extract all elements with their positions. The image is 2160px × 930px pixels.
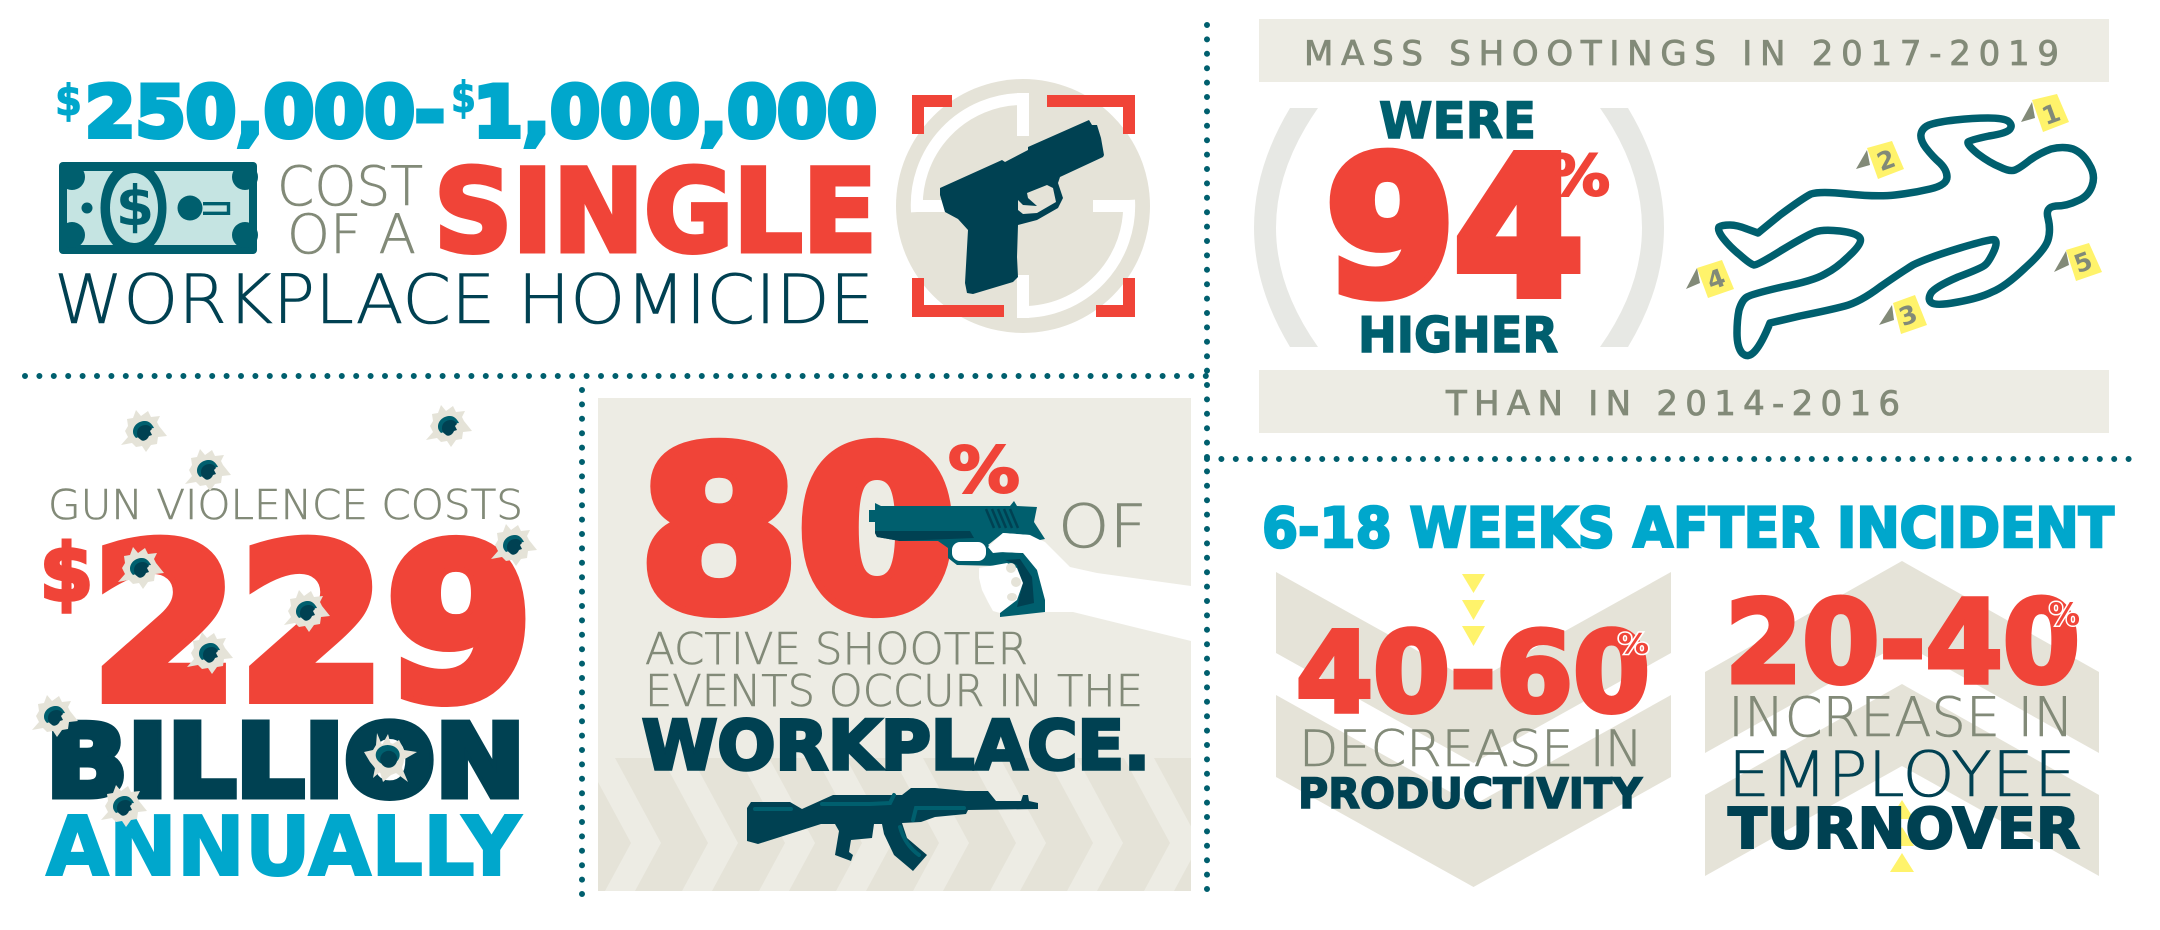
heading: 6-18 WEEKS AFTER INCIDENT — [1262, 496, 2114, 560]
text: billion: BILLION — [46, 703, 525, 820]
evidence marker 2: 2 — [1873, 144, 1899, 177]
stat: 80 percent: 80 — [640, 404, 956, 660]
evidence marker 1: 1 — [2038, 98, 2064, 131]
right parenthesis — [1600, 108, 1664, 347]
panel: 6-18 weeks after incident — [1262, 496, 2114, 887]
stat: 80 percent: % — [948, 434, 1020, 507]
banner: than in 2014-2016 — [1259, 370, 2109, 433]
chalk body outline — [1718, 118, 2093, 356]
text: single: SINGLE — [434, 145, 877, 278]
panel: gun violence costs — [32, 405, 537, 895]
stat: 229 dollars: $ — [40, 529, 93, 619]
stat: 94 percent: % — [1548, 144, 1610, 209]
stat: 20-40 percent: 20-40 — [1725, 576, 2080, 709]
icon: pistol in crosshair — [896, 79, 1150, 333]
text: active shooter events occur in the: ACTIVE SHOOTER — [645, 624, 1028, 675]
evidence marker 5 — [2054, 243, 2102, 281]
banner: mass shootings in 2017-2019: MASS SHOOTINGS IN 2017-2019 — [1304, 34, 2059, 74]
up chevrons — [1705, 561, 2099, 876]
text: employee: EMPLOYEE — [1728, 738, 2076, 811]
text: of: OF — [1058, 492, 1147, 562]
yellow down arrows — [1462, 574, 1485, 646]
stat: 40-60 percent: % — [1618, 627, 1649, 660]
text: workplace homicide: WORKPLACE HOMICIDE — [54, 261, 874, 340]
cost range heading: $ — [55, 76, 82, 126]
banner: mass shootings in 2017-2019 — [1259, 19, 2109, 82]
stat: 229 dollars: 229 — [91, 501, 533, 748]
panel: active shooter — [585, 398, 1200, 891]
evidence marker 4: 4 — [1703, 263, 1729, 296]
text: cost of a: OF A — [287, 203, 416, 266]
text: workplace: WORKPLACE. — [642, 707, 1150, 786]
down chevrons — [1276, 572, 1671, 887]
icon: dollar bill — [59, 161, 258, 255]
cost range heading: 1,000,000 — [473, 72, 877, 154]
panel background — [598, 398, 1191, 891]
text: decrease in: DECREASE IN — [1299, 720, 1643, 778]
stat: 40-60 percent: 40-60 — [1296, 609, 1650, 738]
text: active shooter events occur in the: EVENTS OCCUR IN THE — [645, 666, 1143, 717]
evidence marker 5: 5 — [2070, 246, 2096, 279]
text: higher: HIGHER — [1358, 307, 1558, 364]
cost range heading — [55, 72, 877, 154]
text: productivity: PRODUCTIVITY — [1298, 769, 1643, 818]
evidence marker 1 — [2021, 94, 2069, 132]
text: were: WERE — [1379, 92, 1536, 150]
bullet holes — [32, 405, 537, 827]
chevron band — [585, 758, 1200, 891]
yellow up arrows — [1890, 800, 1914, 872]
icon: hand holding pistol — [869, 501, 1191, 641]
evidence marker 3 — [1879, 295, 1927, 334]
text: cost of a: COST — [277, 155, 423, 218]
cost range heading: 250,000- — [85, 72, 445, 154]
text: increase in: INCREASE IN — [1728, 686, 2074, 749]
evidence marker 4 — [1686, 260, 1734, 298]
stat: 94 percent: 94 — [1326, 119, 1583, 338]
cost range heading: $ — [451, 73, 476, 123]
text: active shooter events occur in the — [645, 624, 1143, 717]
icon: dollar bill: $ — [116, 174, 154, 238]
icon: assault rifle — [747, 788, 1038, 871]
panel: mass shootings — [1254, 19, 2109, 433]
evidence marker 2 — [1856, 141, 1904, 179]
text: gun violence costs: GUN VIOLENCE COSTS — [48, 481, 523, 529]
banner: than in 2014-2016: THAN IN 2014-2016 — [1445, 384, 1900, 424]
evidence marker 3: 3 — [1895, 299, 1921, 332]
left parenthesis — [1254, 108, 1318, 347]
text: cost of a — [277, 155, 423, 266]
text: annually: ANNUALLY — [46, 800, 523, 895]
stat: 20-40 percent: % — [2049, 597, 2080, 633]
panel: cost of a workplace homicide — [54, 72, 1150, 340]
text: turnover: TURNOVER — [1728, 797, 2080, 862]
